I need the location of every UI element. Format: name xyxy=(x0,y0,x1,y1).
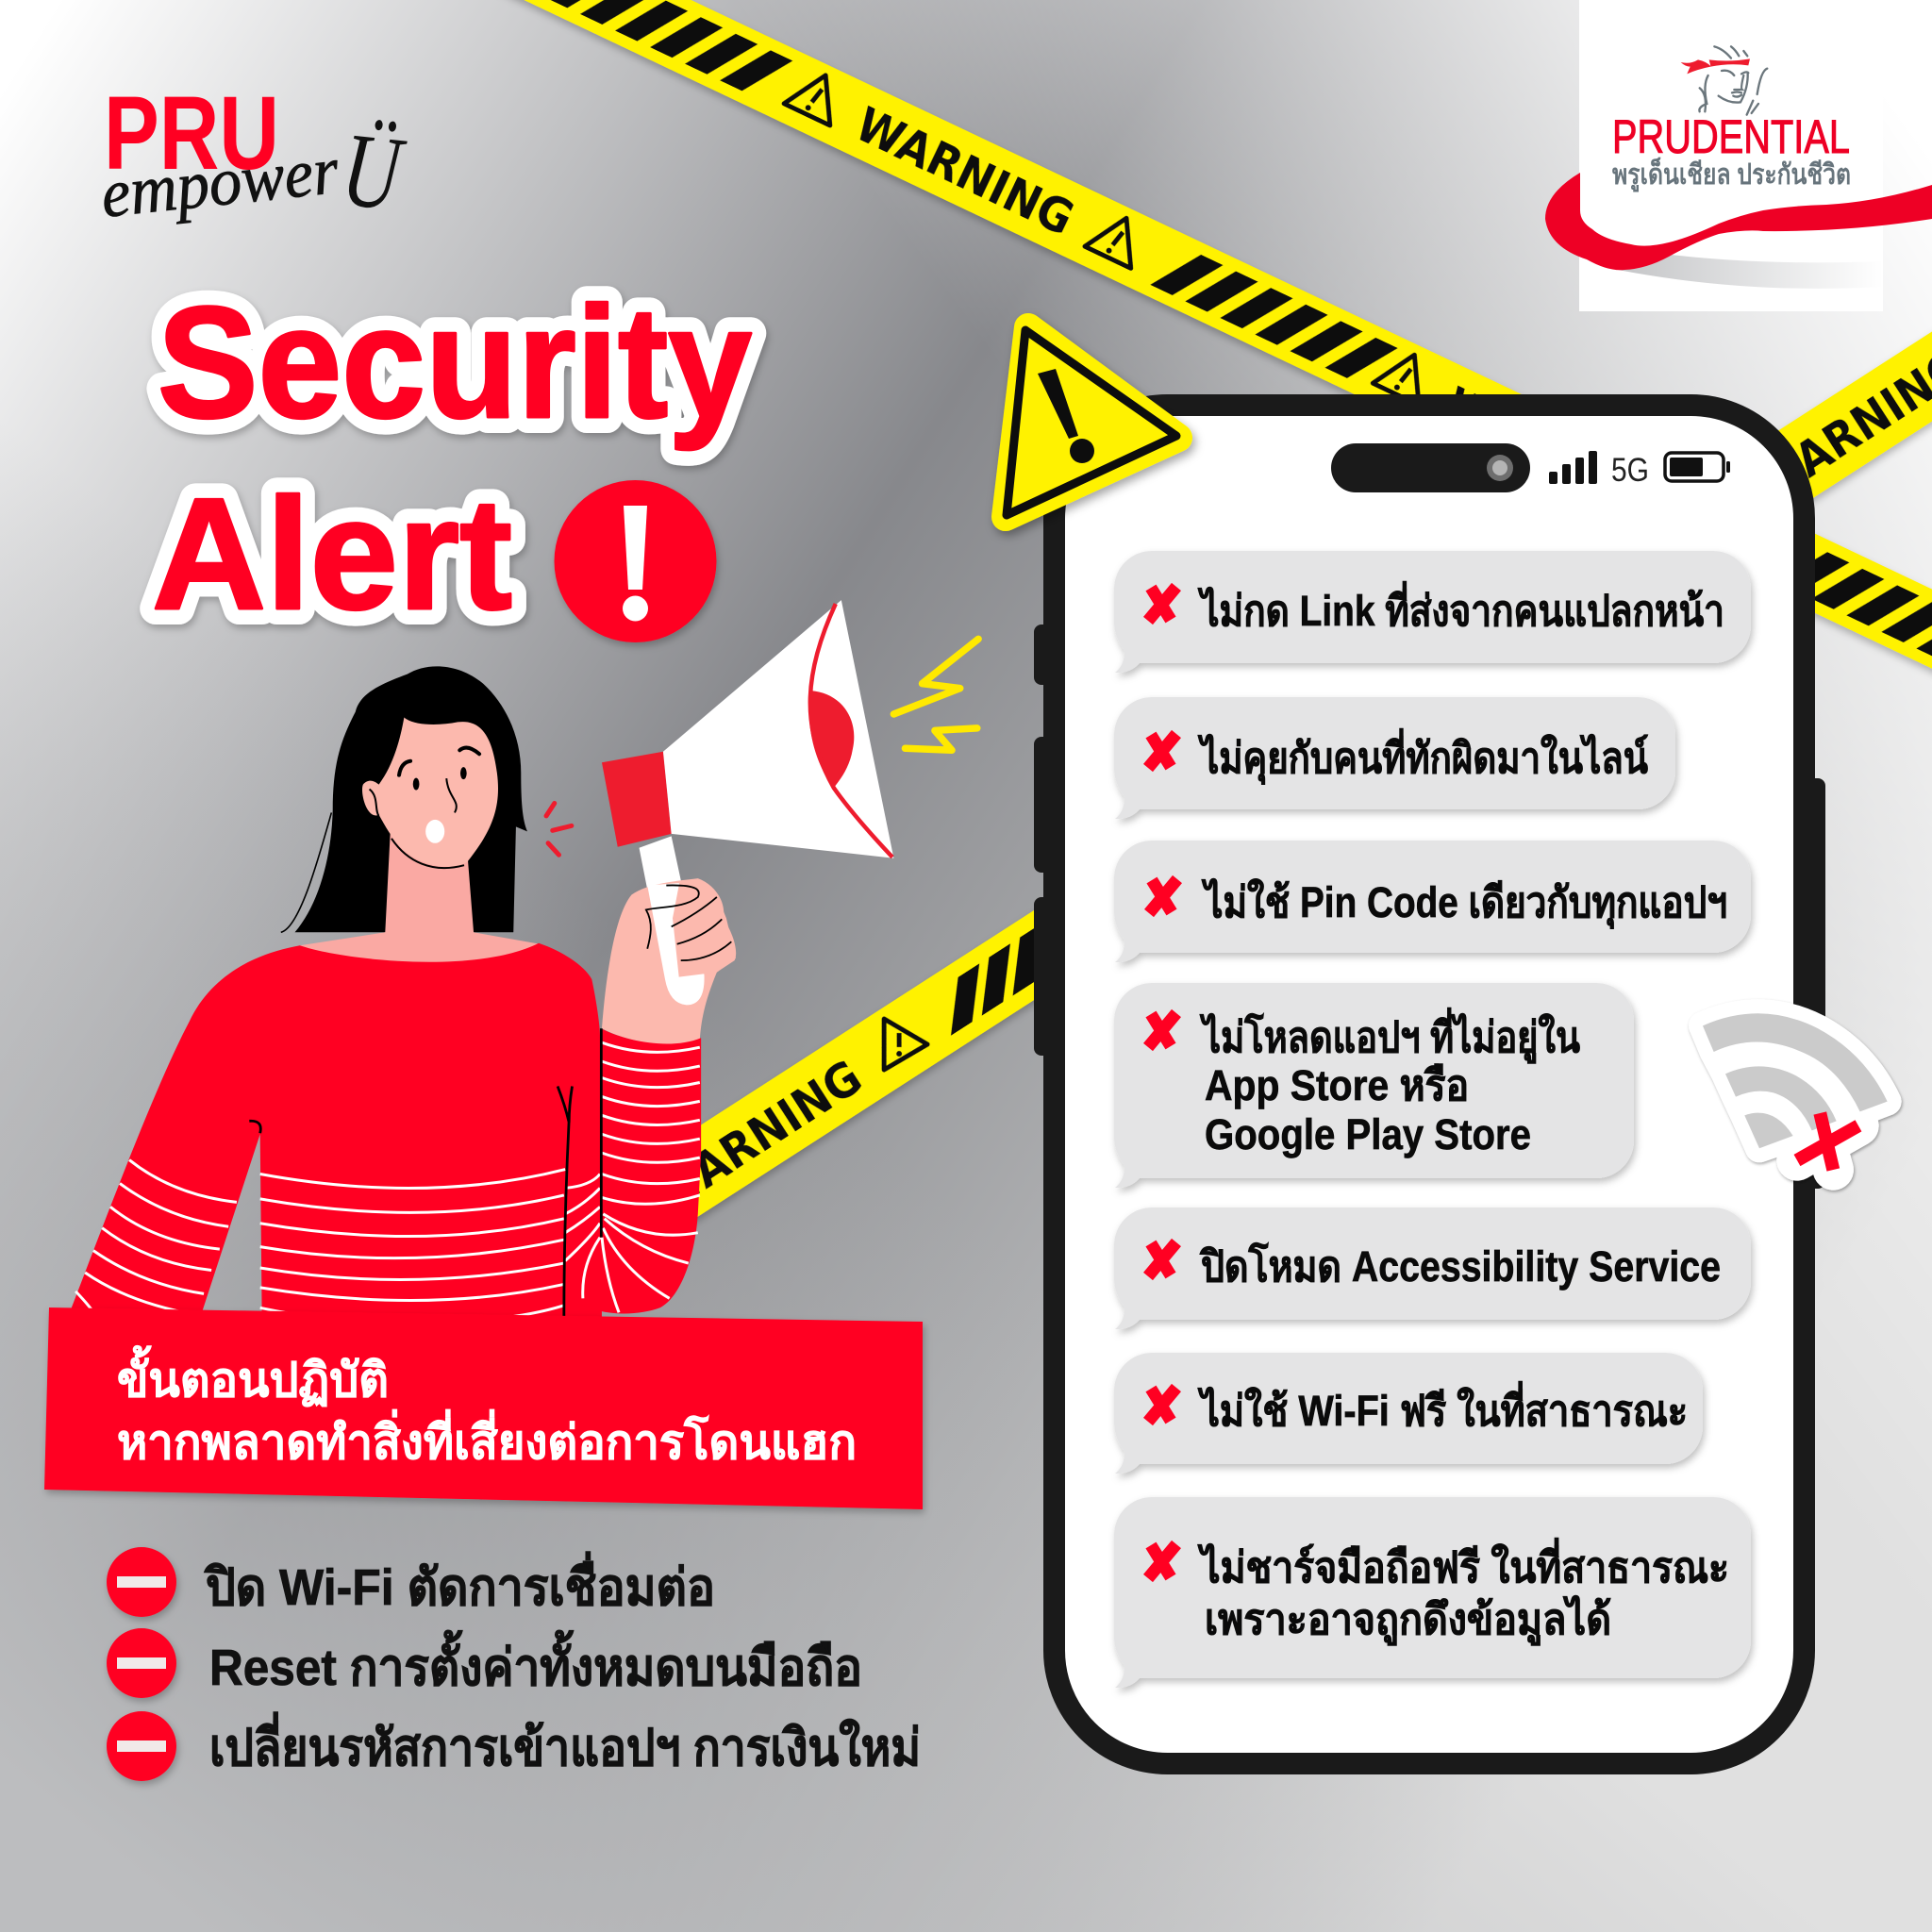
phone list text xyxy=(1197,581,1729,1646)
icon: exclamation circle xyxy=(555,480,717,642)
banner text line 2: หากพลาดทำสิ่งที่เสี่ยงต่อการโดนแฮก xyxy=(117,1409,857,1469)
megaphone handle in hand xyxy=(647,883,705,1005)
megaphone rear xyxy=(602,752,672,847)
bubble 5 xyxy=(1114,1208,1751,1329)
neck xyxy=(300,834,540,965)
mercury head emblem xyxy=(1681,46,1767,115)
bubble 3 xyxy=(1114,841,1751,962)
white panel xyxy=(1579,0,1883,311)
hand and forearm xyxy=(602,878,736,1044)
icon: wifi off sticker xyxy=(1703,1013,1888,1170)
thumb and fingers xyxy=(673,884,736,977)
step 1 xyxy=(107,1547,715,1617)
title: Security xyxy=(158,274,752,451)
phone body xyxy=(1055,406,1804,1764)
hair xyxy=(295,666,527,932)
warning tape: upper, descending to the right xyxy=(161,0,1932,758)
yellow sound bolts xyxy=(893,639,978,750)
phone xyxy=(1034,406,1825,1764)
dynamic island and camera xyxy=(1331,443,1530,492)
red ribbon xyxy=(1545,173,1932,270)
red banner xyxy=(44,1307,923,1509)
warning tape: lower, rising to the right: WARNING xyxy=(643,1050,872,1224)
chat bubbles xyxy=(1114,551,1751,1688)
Thai company name: พรูเด็นเชียล ประกันชีวิต xyxy=(1612,157,1851,192)
step list xyxy=(107,1547,921,1781)
status bar: battery xyxy=(1665,453,1730,481)
status bar: signal xyxy=(1549,451,1597,484)
step 1: ปิด Wi-Fi ตัดการเชื่อมต่อ xyxy=(204,1551,715,1616)
bubble 2 xyxy=(1114,697,1675,819)
step 3: เปลี่ยนรหัสการเข้าแอปฯ การเงินใหม่ xyxy=(209,1711,921,1776)
side buttons xyxy=(1034,625,1825,1189)
sound ticks xyxy=(546,803,572,855)
body fold lines xyxy=(249,1028,601,1320)
item 4 line 2: App Store หรือ xyxy=(1205,1061,1469,1109)
step 3 xyxy=(107,1711,921,1781)
item 4 line 1: ไม่โหลดแอปฯ ที่ไม่อยู่ใน xyxy=(1200,1008,1580,1064)
bubble 7 xyxy=(1114,1497,1751,1688)
PRU empower logo: empower xyxy=(97,132,342,232)
face xyxy=(362,717,498,867)
item 7 line 2: เพราะอาจถูกดึงข้อมูลได้ xyxy=(1205,1594,1611,1646)
item 2: ไม่คุยกับคนที่ทักผิดมาในไลน์ xyxy=(1198,728,1648,785)
megaphone cone xyxy=(663,600,893,858)
sleeve xyxy=(564,1028,701,1314)
soft grey shadow of ribbon xyxy=(1618,253,1883,289)
PRU empower logo: PRU xyxy=(104,75,279,192)
item 3: ไม่ใช้ Pin Code เดียวกับทุกแอปฯ xyxy=(1202,877,1727,929)
warning tape: lower, rising to the right xyxy=(502,231,1932,1318)
item 1: ไม่กด Link ที่ส่งจากคนแปลกหน้า xyxy=(1198,581,1724,635)
step 2 xyxy=(107,1628,862,1698)
bubble 4 xyxy=(1114,983,1634,1188)
woman with megaphone xyxy=(66,600,978,1322)
facial features xyxy=(370,748,479,868)
title: Security xyxy=(158,274,752,451)
hair strand xyxy=(281,812,331,932)
PRU empower logo: Ü xyxy=(337,111,410,234)
red cross marks xyxy=(1148,587,1177,1578)
PRUDENTIAL wordmark: PRUDENTIAL xyxy=(1612,110,1850,163)
title: Alert xyxy=(152,465,512,642)
megaphone handle back xyxy=(640,836,704,1005)
stripes xyxy=(75,1042,700,1319)
megaphone red bell xyxy=(809,691,854,788)
item 4 line 3: Google Play Store xyxy=(1205,1110,1531,1158)
sweater and body xyxy=(66,943,602,1322)
item 6: ไม่ใช้ Wi-Fi ฟรี ในที่สาธารณะ xyxy=(1197,1381,1688,1435)
banner text line 1: ขั้นตอนปฏิบัติ xyxy=(117,1345,389,1407)
warning sign xyxy=(1006,327,1178,517)
bubble 6 xyxy=(1114,1353,1703,1474)
status bar: 5G: 5G xyxy=(1611,452,1649,489)
item 7 line 1: ไม่ชาร์จมือถือฟรี ในที่สาธารณะ xyxy=(1197,1538,1729,1591)
item 5: ปิดโหมด Accessibility Service xyxy=(1199,1241,1721,1291)
bubble 1 xyxy=(1114,551,1751,673)
warning tape: upper, descending to the right: WARNING xyxy=(1437,376,1672,526)
warning tape: upper, descending to the right: WARNING xyxy=(847,97,1082,246)
step 2: Reset การตั้งค่าทั้งหมดบนมือถือ xyxy=(209,1630,862,1696)
PRU empower logo xyxy=(97,75,410,234)
title: Alert xyxy=(152,465,512,642)
Prudential logo xyxy=(1545,0,1932,311)
title xyxy=(152,274,752,642)
